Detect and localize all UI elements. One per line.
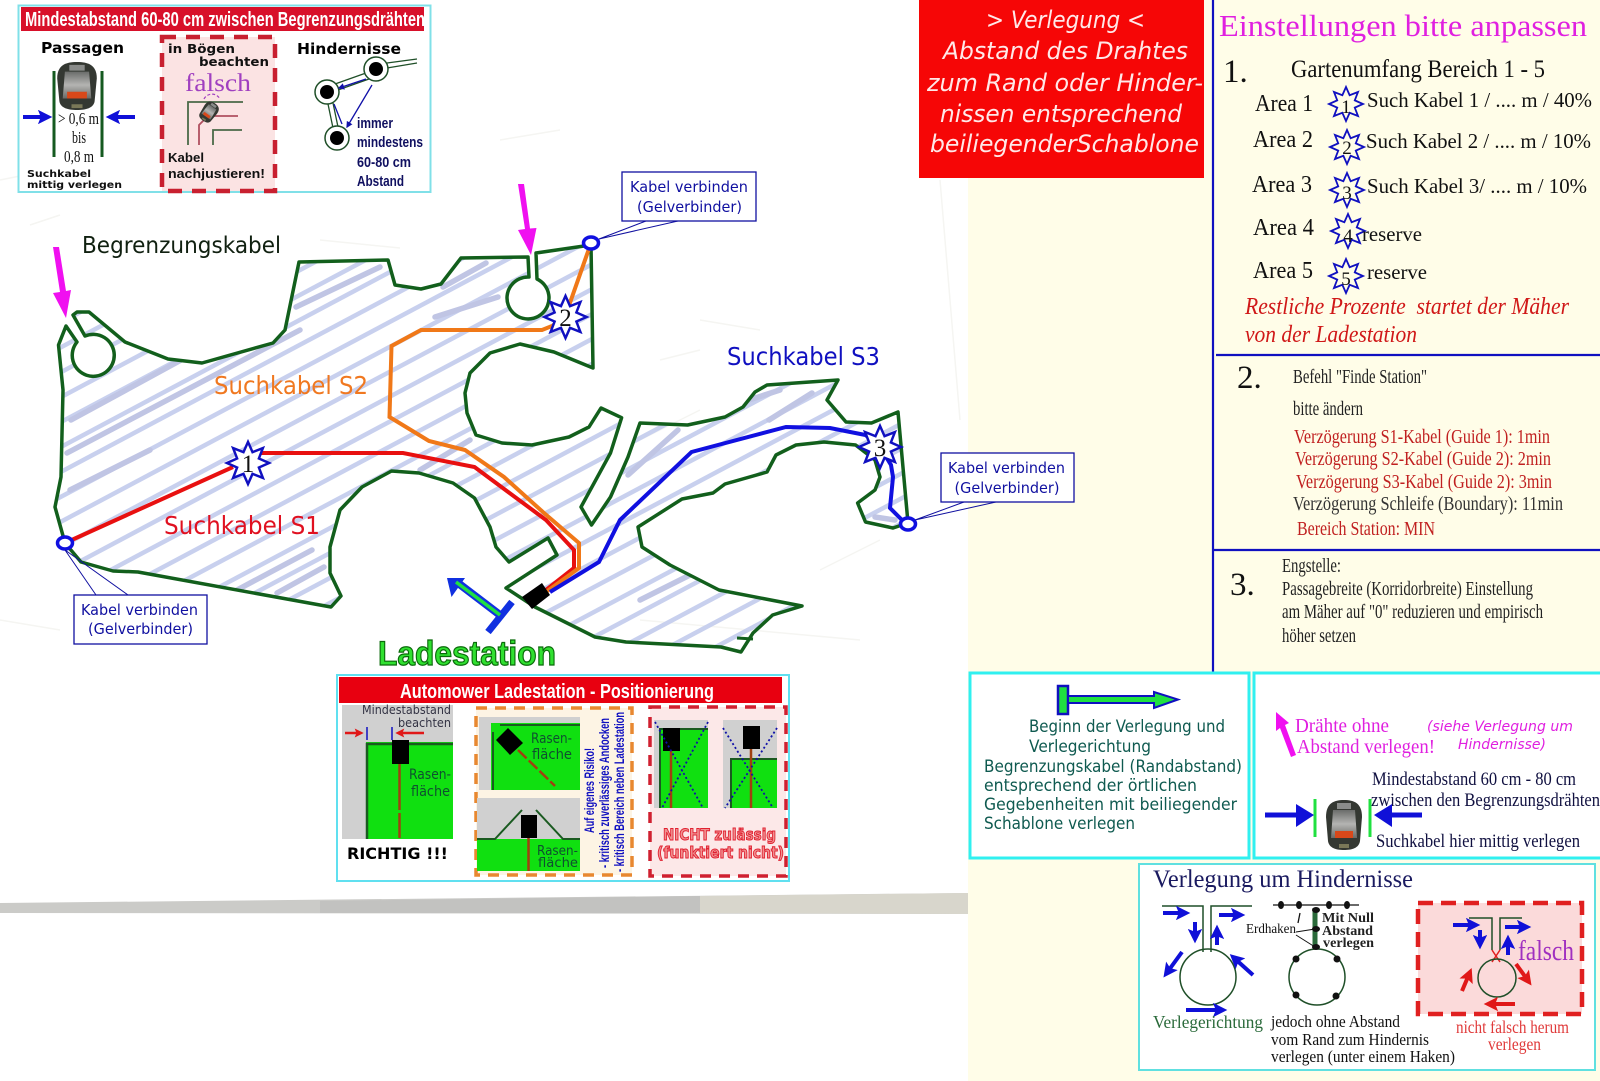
section 3: narrow passage: Engstelle: — [1282, 555, 1341, 577]
sub-panel: at own risk: - kritisch zuverlässiges Andocken — [596, 718, 612, 868]
section 1: garden area settings: 4 — [1343, 226, 1353, 247]
text: minimum spacing: Mindestabstand 60 cm - 80 cm — [1372, 769, 1576, 790]
text: wires without spacing: Abstand verlegen! — [1297, 736, 1435, 758]
sub-panel: correct position: beachten — [398, 716, 451, 730]
section 2: find station command — [1237, 360, 1563, 540]
sub-panel: at own risk — [476, 708, 632, 875]
section 3: narrow passage: höher setzen — [1282, 625, 1356, 647]
label: Begrenzungskabel: Begrenzungskabel — [82, 233, 281, 259]
diagram: zero spacing with earth hooks: Abstand — [1322, 923, 1374, 938]
sub-panel: in Bögen beachten — [162, 37, 275, 191]
charging station block — [522, 583, 550, 609]
star marker 3 — [859, 426, 901, 468]
panel: red notice box: beiliegenderSchablone — [930, 130, 1199, 158]
sub-panel: in Bögen beachten: beachten — [199, 55, 269, 69]
section 1: garden area settings: Area 5 — [1253, 258, 1313, 284]
sub-panel: Passagen: Suchkabel — [27, 169, 91, 180]
arrow: magenta left — [53, 247, 71, 318]
section 1: garden area settings: Such Kabel 3/ .... m / 10% — [1367, 174, 1587, 198]
panel: settings — [1213, 0, 1600, 672]
panel: red notice box — [919, 0, 1204, 178]
callout: connector bottom left — [65, 550, 207, 644]
diagram: zero spacing with earth hooks: jedoch ohne Abstand — [1270, 1012, 1400, 1031]
sub-panel: Passagen: bis — [72, 128, 86, 147]
boundary cable outline — [55, 245, 908, 652]
sub-panel: Hindernisse: immer — [357, 115, 393, 132]
section 1: garden area settings: Area 4 — [1253, 215, 1314, 241]
section 1: garden area settings: Gartenumfang Bereich 1 - 5 — [1291, 56, 1545, 83]
sub-panel: Hindernisse: Hindernisse — [297, 40, 401, 58]
boundary cable stub — [737, 638, 753, 639]
text: see obstacle laying: Hindernisse) — [1458, 737, 1546, 753]
star marker 2: 2 — [559, 305, 572, 332]
panel: wire spacing explanation — [1254, 673, 1600, 858]
section 1: garden area settings: 3 — [1342, 183, 1352, 204]
star marker 3: 3 — [874, 435, 886, 462]
sub-panel: Passagen: mittig verlegen — [27, 180, 122, 191]
sub-panel: at own risk: fläche — [538, 856, 578, 871]
heading: Verlegung um Hindernisse: Verlegung um Hindernisse — [1153, 866, 1413, 893]
text: minimum spacing — [1371, 769, 1600, 852]
sub-panel: Hindernisse: 60-80 cm — [357, 154, 411, 171]
section 2: find station command: Befehl "Finde Station" — [1293, 366, 1427, 388]
text: see obstacle laying — [1427, 719, 1573, 753]
arrow: magenta up — [1276, 712, 1296, 757]
star marker 2 — [544, 296, 587, 338]
diagram: correct direction — [1153, 906, 1263, 1032]
diagram: wrong direction: verlegen — [1488, 1034, 1541, 1054]
sub-panel: in Bögen beachten: Kabel — [168, 150, 204, 165]
sub-panel: Passagen: 0,8 m — [64, 147, 94, 166]
panel: laying around obstacles — [1139, 864, 1595, 1070]
text block: laying instructions: Begrenzungskabel (Randabstand) — [984, 757, 1242, 776]
sub-panel: correct position: fläche — [411, 784, 450, 800]
sub-panel: Hindernisse: Abstand — [357, 173, 404, 190]
text block: laying instructions — [984, 717, 1242, 833]
panel: red notice box: zum Rand oder Hinder- — [926, 69, 1203, 97]
diagram: zero spacing with earth hooks: verlegen (unter einem Haken) — [1271, 1047, 1455, 1066]
label: Suchkabel S2: Suchkabel S2 — [214, 371, 368, 400]
hatched lawn area — [58, 248, 904, 646]
sub-panel: in Bögen beachten: nachjustieren! — [168, 166, 265, 181]
heading: Einstellungen bitte anpassen: Einstellungen bitte anpassen — [1219, 8, 1588, 43]
callout: connector top: (Gelverbinder) — [637, 198, 742, 216]
text block: laying instructions: entsprechend der örtlichen — [984, 776, 1197, 795]
diagram: wrong direction: nicht falsch herum — [1456, 1017, 1569, 1037]
section 1: garden area settings: reserve — [1367, 260, 1427, 284]
sub-panel: in Bögen beachten: falsch — [185, 70, 252, 97]
sub-panel: at own risk: Rasen- — [537, 844, 578, 859]
panel: start of laying explanation — [970, 673, 1249, 858]
icon: mower between wires — [1265, 799, 1422, 850]
label: Suchkabel S1: Suchkabel S1 — [164, 511, 320, 540]
callout: connector right: (Gelverbinder) — [954, 479, 1060, 497]
diagram: correct direction: Verlegerichtung — [1153, 1012, 1263, 1032]
sub-panel: at own risk: - kritisch Bereich neben Ladestation — [611, 712, 627, 872]
text: wires without spacing — [1295, 715, 1435, 758]
panel: Automower Ladestation positioning — [337, 675, 789, 881]
arrow: start of laying — [447, 578, 512, 632]
arrow: magenta top — [518, 184, 536, 255]
sub-panel: correct position — [342, 703, 453, 863]
sub-panel: Passagen: Passagen — [41, 39, 124, 57]
section 1: garden area settings: 5 — [1341, 269, 1351, 290]
section 1: garden area settings: von der Ladestation — [1245, 322, 1417, 348]
star marker 1: 1 — [242, 451, 254, 478]
section 2: find station command: 2. — [1237, 360, 1262, 396]
callout: connector top — [599, 172, 756, 239]
section 1: garden area settings: Area 2 — [1253, 127, 1313, 153]
section 1: garden area settings: Area 3 — [1252, 172, 1312, 198]
diagram: zero spacing with earth hooks — [1246, 901, 1455, 1066]
text: wires without spacing: Drähte ohne — [1295, 715, 1389, 737]
diagram: wrong direction — [1418, 903, 1582, 1054]
diagram: zero spacing with earth hooks: Mit Null — [1322, 910, 1374, 925]
sub-panel: correct position: Mindestabstand — [362, 703, 451, 717]
icon: start arrow — [1058, 686, 1178, 714]
sub-panel: Passagen: > 0,6 m — [58, 109, 99, 128]
callout: connector right — [915, 453, 1074, 520]
heading: minimum distance banner — [21, 7, 425, 31]
callout: connector bottom left: (Gelverbinder) — [88, 620, 193, 638]
guide cable S1 red — [65, 453, 574, 590]
section 1: garden area settings: Area 1 — [1255, 91, 1313, 117]
diagram: zero spacing with earth hooks: verlegen — [1323, 935, 1375, 950]
sub-panel: correct position: Rasen- — [409, 767, 451, 783]
text block: laying instructions: Beginn der Verlegung und — [1029, 717, 1225, 736]
section 1: garden area settings: Restliche Prozente startet der Mäher — [1244, 294, 1570, 320]
heading: minimum distance banner: Mindestabstand 60-80 cm zwischen Begrenzungsdrähten — [25, 9, 425, 31]
section 1: garden area settings: Such Kabel 1 / .... m / 40% — [1367, 88, 1592, 112]
section 1: garden area settings: Such Kabel 2 / .... m / 10% — [1366, 129, 1591, 153]
section 1: garden area settings: 1 — [1341, 97, 1351, 118]
sub-panel: correct position: RICHTIG !!! — [347, 844, 448, 863]
section 3: narrow passage: 3. — [1230, 567, 1255, 603]
star marker 1 — [227, 442, 269, 484]
guide cable S2 orange — [390, 243, 591, 592]
sub-panel: not allowed: (funktiert nicht) — [657, 843, 784, 862]
callout: connector bottom left: Kabel verbinden — [81, 601, 198, 619]
diagram: zero spacing with earth hooks: vom Rand zum Hindernis — [1271, 1030, 1429, 1049]
sub-panel: at own risk: Rasen- — [531, 731, 572, 747]
section 2: find station command: bitte ändern — [1293, 398, 1363, 420]
sub-panel: not allowed — [650, 707, 786, 876]
panel: red notice box: > Verlegung < — [986, 6, 1145, 34]
callout: connector top: Kabel verbinden — [630, 178, 748, 196]
sub-panel: Hindernisse: mindestens — [357, 134, 423, 151]
section 2: find station command: Bereich Station: MIN — [1297, 518, 1435, 540]
section 3: narrow passage — [1230, 555, 1543, 647]
text block: laying instructions: Schablone verlegen — [984, 814, 1135, 833]
section 1: garden area settings: 2 — [1342, 138, 1352, 159]
section 1: garden area settings — [1223, 54, 1592, 348]
text block: laying instructions: Verlegerichtung — [1029, 737, 1151, 756]
sub-panel: Hindernisse — [297, 40, 423, 190]
sub-panel: not allowed: NICHT zulässig — [663, 825, 776, 844]
diagram: zero spacing with earth hooks: Erdhaken — [1246, 922, 1296, 937]
connector points — [58, 237, 916, 549]
diagram: wrong direction: falsch — [1518, 935, 1574, 967]
guide cable S3 blue — [550, 427, 905, 592]
sub-panel: Passagen — [23, 39, 135, 191]
panel: minimum distance passages, curves, obstacles — [18, 6, 430, 192]
text block: laying instructions: Gegebenheiten mit beiliegender — [984, 795, 1237, 814]
label: Ladestation: Ladestation — [378, 635, 556, 673]
sub-panel: in Bögen beachten: in Bögen — [168, 42, 235, 56]
chart: garden plan with boundary and guide cables — [53, 171, 1075, 666]
sub-panel: at own risk: fläche — [532, 747, 572, 763]
panel: red notice box: Abstand des Drahtes — [941, 37, 1188, 65]
text: see obstacle laying: (siehe Verlegung um — [1427, 719, 1573, 735]
panel: red notice box: nissen entsprechend — [940, 100, 1183, 128]
callout: connector right: Kabel verbinden — [948, 459, 1065, 477]
heading: positioning banner: Automower Ladestation - Positionierung — [400, 681, 714, 703]
sub-panel: at own risk: Auf eigenes Risiko! — [581, 748, 597, 833]
section 1: garden area settings: reserve — [1362, 222, 1422, 246]
label: Suchkabel S3: Suchkabel S3 — [727, 342, 880, 371]
section 1: garden area settings: 1. — [1223, 54, 1248, 90]
